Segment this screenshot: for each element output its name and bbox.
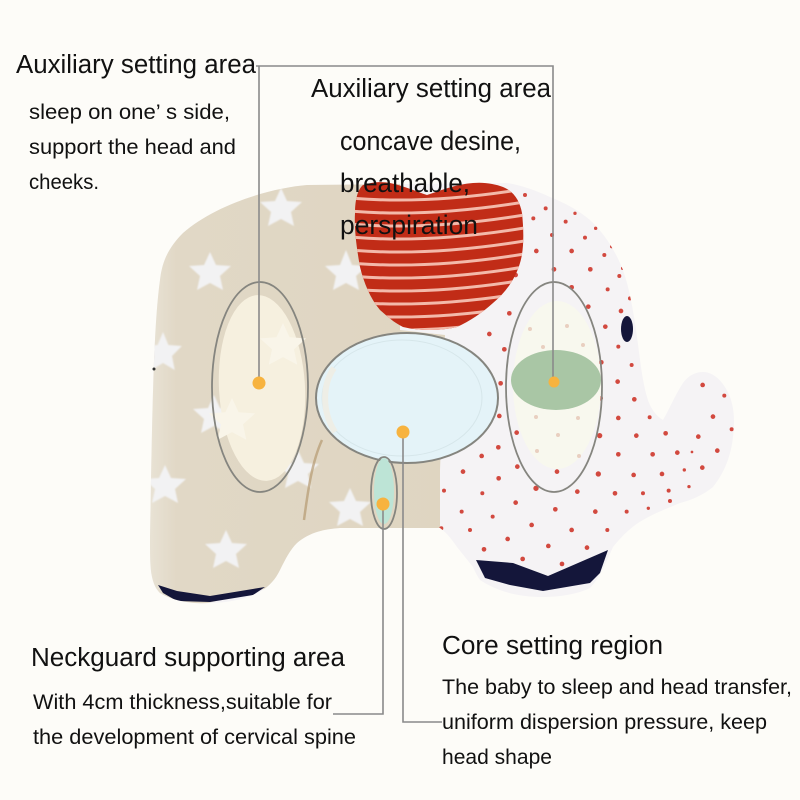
label: core setting region: uniform dispersion pressure, keep	[442, 710, 767, 734]
label: left auxiliary setting area: sleep on one’ s side,	[29, 100, 230, 124]
label: neckguard supporting area	[31, 644, 356, 749]
pillow body	[150, 183, 734, 604]
label: right auxiliary setting area: breathable,	[340, 168, 470, 198]
label: core setting region: The baby to sleep and head transfer,	[442, 675, 792, 699]
navy left foot	[158, 585, 265, 602]
elephant eye	[621, 316, 633, 342]
label: right auxiliary setting area: perspiration	[340, 210, 478, 240]
side seam dot	[152, 368, 156, 370]
beige starred fabric	[140, 170, 445, 620]
label: core setting region	[442, 632, 792, 769]
label: core setting region: head shape	[442, 745, 552, 769]
label: neckguard supporting area: the development of cervical spine	[33, 725, 356, 749]
right zone: auxiliary setting area	[506, 282, 602, 492]
marker dots	[252, 376, 560, 510]
label: left auxiliary setting area: support the head and	[29, 135, 236, 159]
faded dots	[528, 324, 585, 458]
label: right auxiliary setting area	[311, 75, 552, 240]
label: core setting region: Core setting region	[442, 632, 663, 660]
striped red ear	[354, 182, 524, 330]
label: left auxiliary setting area: cheeks.	[29, 170, 99, 194]
label: right auxiliary setting area: concave desine,	[340, 126, 521, 156]
white stars	[144, 188, 371, 568]
label: left auxiliary setting area	[16, 51, 257, 194]
label: neckguard supporting area: Neckguard supporting area	[31, 644, 346, 672]
navy right foot	[476, 550, 608, 591]
pillow illustration	[150, 182, 734, 604]
label: left auxiliary setting area: Auxiliary setting area	[16, 51, 257, 79]
neck zone: neckguard supporting area	[371, 457, 397, 529]
leader lines	[256, 66, 553, 722]
label: right auxiliary setting area: Auxiliary setting area	[311, 75, 552, 103]
fabric wrinkle	[304, 440, 322, 520]
left zone: auxiliary setting area	[209, 282, 310, 492]
centre zone: core setting region	[316, 333, 498, 463]
label: neckguard supporting area: With 4cm thickness,suitable for	[33, 690, 332, 714]
red polka dots	[439, 193, 734, 566]
